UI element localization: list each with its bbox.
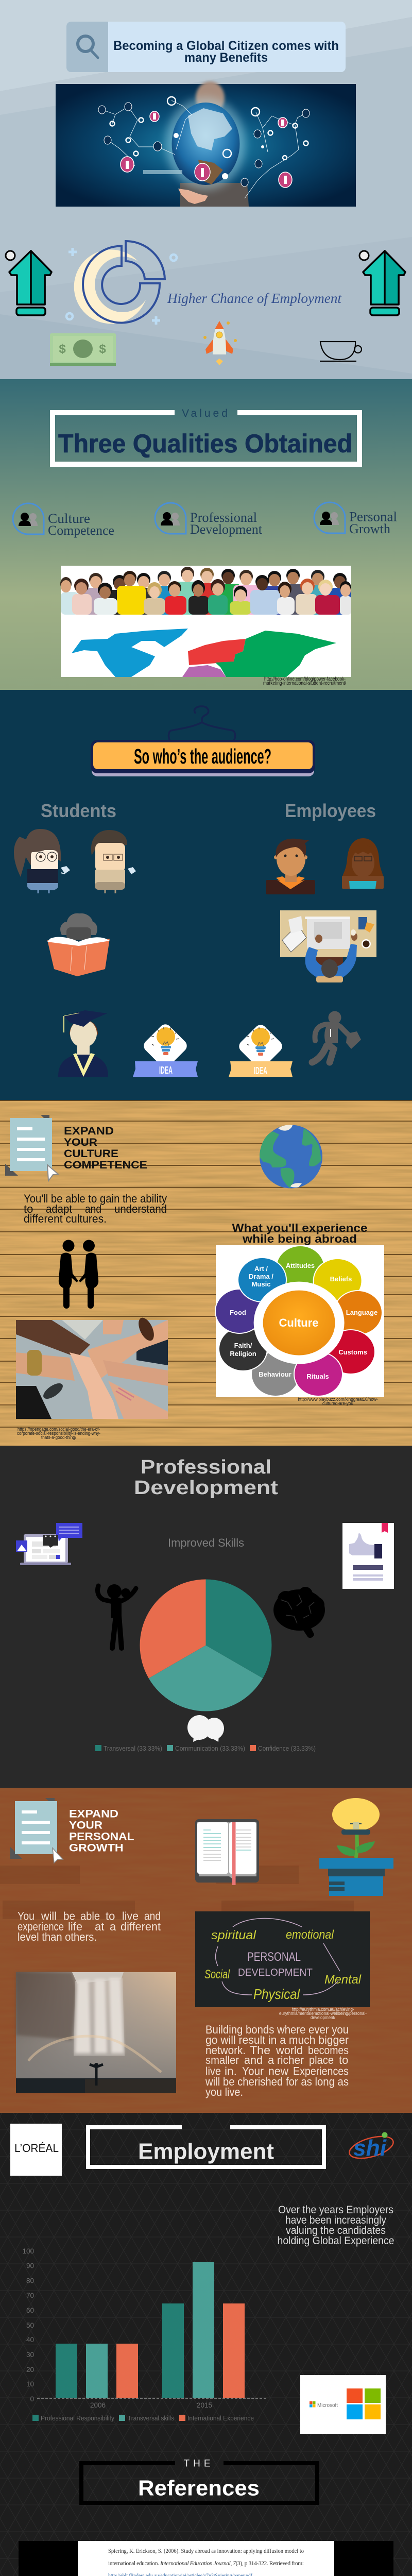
heading: expand your culture competence: COMPETENCE bbox=[64, 1159, 147, 1171]
text: employers valuing global experience bbox=[277, 2204, 394, 2247]
diagram: culture flower: Religion bbox=[230, 1350, 256, 1358]
legend: pie chart: Communication (33.33%) bbox=[175, 1744, 245, 1752]
heading: what you'll experience bbox=[232, 1222, 368, 1245]
icon: rocket bbox=[203, 321, 237, 365]
section: three qualities bbox=[0, 379, 412, 690]
text: building bonds: becomes bbox=[308, 2044, 349, 2057]
text: building bonds: The bbox=[250, 2044, 270, 2057]
bar chart: employer valued skills: Transversal skills bbox=[128, 2414, 174, 2422]
quality: personal growth: Personal bbox=[349, 509, 397, 524]
text: ability to adapt: different cultures. bbox=[24, 1212, 107, 1225]
illustration: employee at desk from above bbox=[280, 910, 376, 982]
bar chart: employer valued skills: 100 bbox=[22, 2247, 34, 2255]
chart title: Improved Skills bbox=[168, 1536, 244, 1549]
text: building bonds: new bbox=[268, 2065, 288, 2077]
photo: personal development blackboard: Social bbox=[204, 1968, 230, 1981]
legend: pie chart: Transversal (33.33%) bbox=[104, 1744, 162, 1752]
text: building bonds: go will result in a much bigger bbox=[205, 2033, 349, 2046]
text: building bonds: to bbox=[339, 2054, 348, 2066]
bar chart: employer valued skills: 0 bbox=[30, 2395, 34, 2403]
text: building bonds: Building bonds where ever you bbox=[205, 2023, 349, 2036]
legend: pie chart: Confidence (33.33%) bbox=[258, 1744, 316, 1752]
quality: personal growth bbox=[314, 502, 397, 536]
text: building bonds: in. bbox=[225, 2065, 237, 2077]
character: employee man bbox=[266, 839, 315, 894]
icon: teal up arrow left bbox=[6, 251, 52, 315]
text: live and experience: different bbox=[121, 1920, 161, 1933]
text: building bonds: will be cherished for as long as bbox=[205, 2075, 349, 2088]
icon: idea bulb yellow: IDEA bbox=[254, 1065, 267, 1077]
logo: SHI bbox=[347, 2132, 396, 2162]
text: building bonds: a bbox=[268, 2054, 274, 2066]
photo: personal development blackboard: PERSONAL bbox=[247, 1950, 301, 1964]
icon: idea bulb blue bbox=[133, 1022, 198, 1077]
diagram: culture flower: Rituals bbox=[306, 1372, 329, 1380]
section: expand personal growth bbox=[0, 1788, 412, 2113]
pie chart: improved skills bbox=[140, 1580, 271, 1711]
icon: thumbs up card bbox=[342, 1523, 394, 1589]
heading: what you'll experience: What you'll experience bbox=[232, 1222, 368, 1234]
diagram: culture flower: Food bbox=[230, 1309, 246, 1316]
photo: personal development blackboard bbox=[195, 1911, 370, 2007]
bar chart: employer valued skills: 20 bbox=[26, 2366, 34, 2374]
text: live and experience: be bbox=[63, 1910, 75, 1923]
heading frame: employment bbox=[88, 2127, 324, 2167]
caption: npengage source: corporate-social-responsibility-is-ending-why- bbox=[17, 1431, 100, 1436]
diagram: culture flower: Art / bbox=[254, 1265, 268, 1273]
text: building bonds: richer bbox=[277, 2054, 304, 2066]
section: professional development bbox=[0, 1446, 412, 1788]
diagram: culture flower: Faith/ bbox=[234, 1342, 252, 1349]
bar chart: employer valued skills: 40 bbox=[26, 2336, 34, 2344]
text: ability to adapt: adapt bbox=[46, 1202, 72, 1215]
quality: culture competence: Culture bbox=[48, 511, 90, 526]
quality: professional development bbox=[155, 503, 263, 537]
quality: culture competence: Competence bbox=[48, 523, 114, 538]
caption: npengage source: https://npengage.com/social-good/the-era-of- bbox=[18, 1427, 100, 1432]
heading: hanger sign: So who’s the audience? bbox=[134, 744, 271, 768]
text: live and experience: able bbox=[80, 1910, 100, 1923]
text: building bonds bbox=[205, 2023, 349, 2098]
diagram: culture flower bbox=[215, 1245, 384, 1397]
bar chart: employer valued skills: Professional Responsibility bbox=[41, 2414, 114, 2422]
heading frame: employment: Employment bbox=[138, 2139, 274, 2164]
heading: what you'll experience: while being abroad bbox=[242, 1232, 357, 1245]
diagram: culture flower: Language bbox=[346, 1309, 377, 1316]
icon: two people holding hands bbox=[59, 1240, 98, 1309]
photo: stacked hands bbox=[16, 1315, 168, 1419]
heading: expand your culture competence bbox=[64, 1125, 147, 1171]
heading: students: Students bbox=[41, 800, 116, 821]
icon: pie logo bbox=[66, 241, 177, 325]
bar chart: employer valued skills: 90 bbox=[26, 2262, 34, 2270]
diagram: culture flower: Attitudes bbox=[286, 1262, 315, 1269]
heading: professional development: Development bbox=[134, 1477, 278, 1499]
references document: international education. International Education Journal, 7(3), p 314-322. Retrieved from: bbox=[108, 2561, 304, 2567]
icon: laptop with chat bbox=[16, 1523, 82, 1565]
character: employee woman bbox=[342, 838, 384, 889]
bar chart: employer valued skills: 30 bbox=[26, 2351, 34, 2359]
photo: waterfall and rainbow bbox=[16, 1972, 176, 2093]
heading: expand your personal growth: EXPAND bbox=[69, 1808, 118, 1820]
photo: personal development blackboard: spiritual bbox=[211, 1928, 256, 1942]
section: expand culture competence bbox=[0, 1100, 412, 1446]
text: ability to adapt: and bbox=[85, 1202, 101, 1215]
heading: expand your culture competence: CULTURE bbox=[64, 1148, 118, 1160]
quality: culture competence bbox=[13, 503, 114, 538]
text: live and experience: at bbox=[95, 1920, 104, 1933]
caption: hop-online source: http://hop-online.com/blog/power-facebook- bbox=[264, 676, 346, 682]
photo: diverse group above world map bbox=[60, 566, 351, 677]
text: building bonds: Experiences bbox=[293, 2065, 349, 2077]
text: higher chance of employment: Higher Chance of Employment bbox=[167, 291, 342, 306]
heading: employees: Employees bbox=[285, 800, 376, 821]
photo: personal development blackboard: Mental bbox=[324, 1973, 362, 1987]
heading: expand your personal growth: PERSONAL bbox=[69, 1831, 134, 1843]
quality: personal growth: Growth bbox=[349, 521, 390, 536]
caption: eurythmia source: development/ bbox=[311, 2015, 335, 2021]
text: building bonds: network. bbox=[205, 2044, 246, 2057]
heading frame: three qualities obtained: Three Qualities Obtained bbox=[58, 429, 352, 458]
icon: idea bulb blue: IDEA bbox=[159, 1065, 173, 1076]
character: person reading a book bbox=[47, 913, 110, 976]
icon: earth globe bbox=[260, 1125, 322, 1188]
heading: hanger sign bbox=[91, 706, 315, 776]
text: building bonds: you live. bbox=[205, 2086, 243, 2098]
text: live and experience bbox=[18, 1910, 161, 1943]
heading: professional development bbox=[134, 1456, 278, 1499]
section: employment and references bbox=[0, 2113, 412, 2576]
diagram: culture flower: Customs bbox=[338, 1348, 367, 1356]
text: live and experience: life bbox=[68, 1920, 82, 1933]
caption: hop-online source bbox=[263, 676, 346, 686]
photo: personal development blackboard: emotional bbox=[286, 1928, 334, 1942]
icon: magnifier bbox=[78, 36, 98, 58]
icon: speech bubbles bbox=[187, 1715, 224, 1742]
text: ability to adapt: to bbox=[24, 1202, 33, 1215]
heading: expand your personal growth bbox=[69, 1808, 134, 1854]
text: building bonds: place bbox=[309, 2054, 334, 2066]
title banner bbox=[66, 22, 346, 72]
caption: npengage source bbox=[17, 1427, 100, 1440]
text: employers valuing global experience: Over the years Employers bbox=[278, 2204, 393, 2216]
logo: Microsoft: Microsoft bbox=[317, 2402, 338, 2409]
title banner: Becoming a Global Citizen comes with bbox=[113, 39, 339, 53]
heading frame: the references bbox=[81, 2459, 317, 2503]
heading frame: three qualities obtained: Valued bbox=[182, 408, 230, 419]
caption: playbuzz source: cultured-are-you bbox=[322, 1401, 353, 1406]
text: employers valuing global experience: holding Global Experience bbox=[277, 2235, 394, 2247]
heading: expand your culture competence: YOUR bbox=[64, 1137, 97, 1148]
heading: expand your culture competence: EXPAND bbox=[64, 1125, 114, 1137]
quality: professional development: Professional bbox=[190, 510, 257, 525]
text: ability to adapt: You'll be able to gain the ability bbox=[24, 1192, 167, 1205]
icon: money bill bbox=[50, 333, 116, 366]
icon: brain bbox=[273, 1587, 325, 1638]
references document: Spiering, K. Erickson, S. (2006). Study abroad as innovation: applying diffusion model to bbox=[108, 2548, 304, 2554]
text: building bonds: world bbox=[276, 2044, 303, 2057]
photo: globe held in hand with network bbox=[56, 81, 356, 207]
bar chart: employer valued skills: 2006 bbox=[90, 2401, 106, 2409]
bar chart: employer valued skills: 50 bbox=[26, 2321, 34, 2329]
caption: playbuzz source: http://www.playbuzz.com/kinggreat10/how- bbox=[298, 1397, 378, 1402]
character: student boy bbox=[91, 830, 136, 893]
photo: personal development blackboard: Physical bbox=[253, 1986, 300, 2002]
text: live and experience: will bbox=[41, 1910, 57, 1923]
heading: professional development: Professional bbox=[141, 1456, 271, 1478]
icon: coffee cup bbox=[320, 342, 362, 361]
caption: eurythmia source bbox=[279, 2007, 367, 2021]
caption: eurythmia source: eurythmia/mentalemotional-wellbeing/personal- bbox=[279, 2011, 367, 2016]
text: live and experience: a bbox=[110, 1920, 116, 1933]
character: student girl bbox=[14, 829, 70, 893]
references document bbox=[19, 2541, 393, 2576]
title banner: many Benefits bbox=[184, 50, 268, 65]
section: global citizen benefits bbox=[0, 0, 412, 379]
text: building bonds: and bbox=[244, 2054, 263, 2066]
character: graduate bbox=[58, 1010, 108, 1077]
diagram: culture flower: Beliefs bbox=[330, 1275, 352, 1283]
diagram: culture flower: Behaviour bbox=[259, 1370, 291, 1378]
icon: money bill: $ bbox=[59, 342, 66, 356]
icon: teal up arrow right bbox=[359, 251, 405, 315]
icon: light bulb plant bbox=[319, 1798, 393, 1896]
heading frame: the references: References bbox=[138, 2476, 260, 2500]
icon: walking businessman bbox=[312, 1011, 361, 1062]
heading frame: the references: THE bbox=[183, 2459, 214, 2469]
text: building bonds: smaller bbox=[205, 2054, 239, 2066]
text: ability to adapt bbox=[24, 1192, 167, 1225]
icon: idea bulb yellow bbox=[229, 1022, 293, 1077]
quality: professional development: Development bbox=[190, 522, 263, 537]
bar chart: employer valued skills: 2015 bbox=[197, 2401, 212, 2409]
heading: expand your personal growth: GROWTH bbox=[69, 1842, 124, 1854]
text: live and experience: experience bbox=[18, 1920, 64, 1933]
caption: hop-online source: marketing-international-student-recruitment/ bbox=[263, 681, 346, 686]
text: ability to adapt: understand bbox=[114, 1202, 167, 1215]
text: live and experience: live bbox=[122, 1910, 139, 1923]
text: live and experience: to bbox=[106, 1910, 115, 1923]
logo: L'Oreal: L’ORÉAL bbox=[14, 2142, 59, 2155]
text: employers valuing global experience: have been increasingly bbox=[285, 2214, 386, 2226]
bar chart: employer valued skills: 10 bbox=[26, 2380, 34, 2388]
legend: pie chart bbox=[95, 1744, 316, 1752]
icon: document with cursor bbox=[5, 1115, 58, 1181]
photo: personal development blackboard: DEVELOPMENT bbox=[238, 1967, 313, 1978]
text: building bonds: live bbox=[205, 2065, 221, 2077]
text: live and experience: You bbox=[18, 1910, 35, 1923]
diagram: culture flower: Culture bbox=[279, 1316, 318, 1329]
icon: stick figure flexing bbox=[97, 1584, 136, 1648]
text: employers valuing global experience: valuing the candidates bbox=[286, 2225, 386, 2236]
caption: playbuzz source bbox=[298, 1397, 378, 1406]
heading: expand your personal growth: YOUR bbox=[69, 1820, 102, 1831]
diagram: culture flower: Music bbox=[252, 1280, 270, 1288]
bar chart: employer valued skills: 70 bbox=[26, 2292, 34, 2299]
caption: eurythmia source: http://eurythmia.com.au/achieving- bbox=[291, 2007, 354, 2012]
bar chart: employer valued skills bbox=[22, 2247, 266, 2422]
logo: L'Oreal bbox=[10, 2124, 62, 2176]
caption: npengage source: thats-a-good-thing/ bbox=[41, 1435, 76, 1440]
bar chart: employer valued skills: 60 bbox=[26, 2307, 34, 2314]
logo: Microsoft bbox=[300, 2375, 386, 2434]
icon: document with cursor bbox=[10, 1798, 63, 1863]
bar chart: employer valued skills: International Experience bbox=[187, 2414, 254, 2422]
text: live and experience: level than others. bbox=[18, 1930, 97, 1943]
logo: SHI: shi bbox=[353, 2136, 387, 2161]
bar chart: employer valued skills: 80 bbox=[26, 2277, 34, 2284]
icon: money bill: $ bbox=[99, 342, 106, 356]
icon: open book bbox=[195, 1819, 259, 1885]
text: building bonds: Your bbox=[242, 2065, 264, 2077]
diagram: culture flower: Drama / bbox=[249, 1273, 273, 1280]
text: live and experience: and bbox=[144, 1910, 161, 1923]
heading frame: three qualities obtained bbox=[53, 408, 359, 464]
section: audience bbox=[0, 690, 412, 1100]
